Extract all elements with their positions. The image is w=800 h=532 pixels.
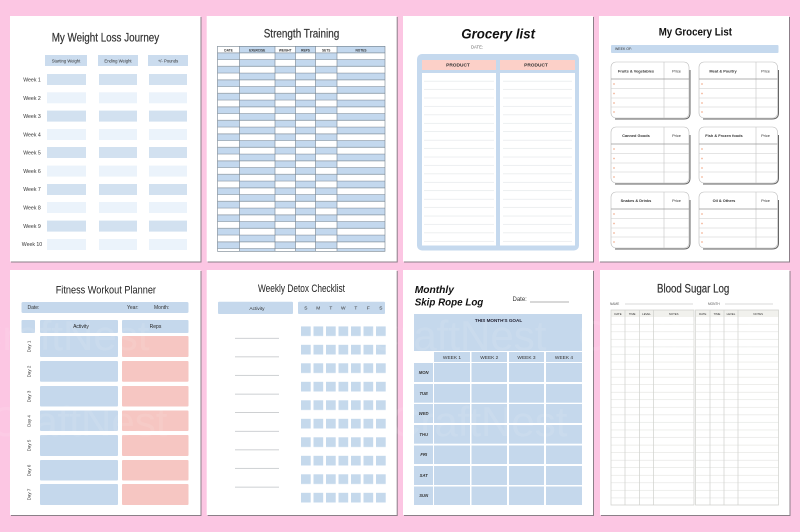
watermark: CraftNest [578, 312, 756, 359]
page: strength training [207, 16, 398, 262]
right log table: LEVEL [727, 312, 736, 316]
category labels: Fish & Frozen foods [705, 133, 743, 138]
column headers: Ending Weight [104, 58, 132, 64]
left log table: LEVEL [642, 312, 651, 316]
price labels: Price [672, 133, 681, 138]
weekday header: W [341, 306, 346, 312]
watermark: CraftNest [369, 312, 547, 359]
day labels [419, 370, 430, 498]
day labels: SAT [420, 473, 428, 478]
category labels: Meat & Poultry [709, 68, 737, 74]
weekday header: S [379, 306, 382, 312]
week headers: WEEK 1 [443, 355, 461, 361]
title: my grocery list: My Grocery List [659, 27, 732, 39]
page: my weight loss journey [10, 16, 202, 262]
activity header: Activity [249, 306, 265, 312]
watermark [0, 312, 756, 445]
title: my weight loss journey: My Weight Loss Journey [52, 33, 159, 45]
goal box: THIS MONTH'S GOAL [475, 318, 522, 323]
date bar: Date: [28, 305, 39, 311]
week labels: Week 8 [23, 206, 41, 212]
day grid [414, 363, 582, 505]
weekday header: F [367, 306, 370, 312]
day labels: Day 7 [26, 488, 32, 500]
day labels: Day 2 [26, 365, 32, 377]
table headers: SETS [322, 48, 330, 52]
name and month fields [610, 302, 773, 306]
weekday header: T [329, 306, 332, 312]
week labels: Week 4 [23, 132, 41, 138]
name and month fields: MONTH [708, 302, 720, 306]
week headers: WEEK 2 [480, 355, 499, 361]
reps cells [122, 336, 188, 505]
price labels: Price [761, 198, 770, 203]
day labels: SUN [419, 493, 429, 498]
price labels: Price [672, 198, 681, 203]
weight rows [47, 74, 187, 250]
price labels: Price [761, 68, 770, 74]
title: grocery list: Grocery list [461, 25, 536, 41]
blue list panel: PRODUCT [524, 62, 548, 68]
table headers: NOTES [356, 48, 366, 52]
week labels: Week 9 [23, 224, 41, 230]
price labels [672, 68, 770, 203]
checkbox grid [301, 326, 386, 503]
day labels: THU [419, 432, 429, 437]
table headers: REPS [301, 48, 310, 52]
week labels: Week 10 [22, 242, 42, 248]
week headers [434, 352, 582, 362]
week labels: Week 2 [23, 96, 41, 102]
weekday header: M [316, 306, 320, 312]
page: blood sugar log [600, 270, 790, 516]
title: weekly detox checklist: Weekly Detox Checklist [258, 283, 345, 295]
date bar [22, 302, 188, 313]
training table [218, 46, 385, 251]
left log table: TIME [629, 312, 636, 316]
right log table: NOTES [753, 312, 763, 316]
watermark: CraftNest [390, 398, 568, 445]
left log table: NOTES [669, 312, 679, 316]
category labels: Fruits & Vegetables [618, 68, 654, 74]
column headers: +/- Pounds [158, 58, 178, 64]
name and month fields: NAME [610, 302, 619, 306]
day labels: TUE [420, 391, 428, 396]
weekday header [298, 302, 385, 314]
title: monthly skip rope log [415, 284, 484, 308]
activity lines [235, 320, 279, 488]
day labels: Day 6 [26, 464, 32, 476]
day labels: MON [419, 370, 430, 375]
page: weekly detox checklist [207, 270, 398, 516]
title: blood sugar log: Blood Sugar Log [657, 283, 729, 295]
day labels [26, 340, 32, 500]
page: monthly skip rope log [403, 270, 594, 516]
day labels: Day 4 [26, 415, 32, 427]
week of bar [611, 45, 778, 53]
day labels: Day 5 [26, 439, 32, 451]
title: monthly skip rope log: Monthly [415, 284, 455, 296]
date bar: Month: [154, 305, 169, 311]
week labels [22, 78, 42, 248]
price labels: Price [672, 68, 681, 74]
week headers: WEEK 4 [555, 355, 573, 361]
date field: Date: [512, 297, 527, 303]
category labels: Snakes & Drinks [621, 198, 651, 203]
blue list panel [417, 54, 579, 250]
table headers: Activity [73, 324, 89, 330]
title: monthly skip rope log: Skip Rope Log [415, 296, 484, 308]
category boxes [611, 62, 778, 249]
table headers [22, 320, 188, 333]
page: fitness workout planner [10, 270, 202, 516]
left log table: DATE [614, 312, 622, 316]
title: fitness workout planner: Fitness Workout Planner [56, 284, 156, 296]
date bar: Year: [127, 305, 138, 311]
day labels: Day 3 [26, 390, 32, 402]
day labels: WED [419, 411, 429, 416]
week labels: Week 6 [23, 169, 41, 175]
table headers [224, 48, 366, 52]
activity header [218, 302, 293, 314]
date field [512, 297, 569, 303]
category labels: Canned Goods [622, 133, 650, 138]
column headers: Starting Weight [52, 58, 81, 64]
page: my grocery list [599, 16, 790, 262]
blue list panel: PRODUCT [446, 62, 470, 68]
table headers: Reps [150, 324, 162, 330]
week labels: Week 5 [23, 151, 41, 157]
left log table [611, 310, 694, 505]
table headers: DATE [224, 48, 233, 52]
day labels: FRI [420, 452, 428, 457]
column headers [45, 55, 188, 66]
right log table: DATE [699, 312, 706, 316]
date label: DATE: [471, 44, 483, 49]
price labels: Price [761, 133, 770, 138]
title: strength training: Strength Training [264, 28, 339, 40]
category labels [618, 68, 743, 203]
week of bar: WEEK OF: [615, 47, 632, 51]
week labels: Week 1 [23, 78, 41, 84]
page: grocery list [403, 16, 594, 262]
table headers: WEIGHT [279, 48, 292, 52]
day labels: Day 1 [26, 340, 32, 352]
table headers: EXERCISE [249, 48, 265, 52]
goal box [414, 314, 582, 351]
weekday header: T [354, 306, 357, 312]
right log table [696, 310, 778, 505]
right log table: TIME [714, 312, 720, 316]
category labels: Oil & Others [713, 198, 735, 203]
activity cells [40, 336, 118, 505]
week labels: Week 3 [23, 114, 41, 120]
week headers: WEEK 3 [517, 355, 536, 361]
weekday header: S [304, 306, 307, 312]
week labels: Week 7 [23, 187, 41, 193]
